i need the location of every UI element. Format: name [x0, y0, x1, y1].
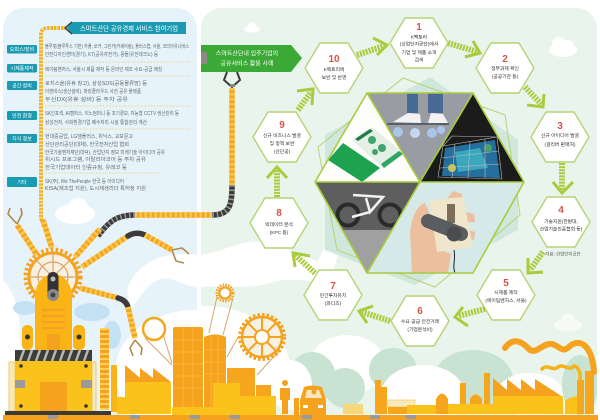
ground strip: [3, 411, 598, 420]
header: participating companies: [65, 22, 186, 34]
step 1 hexagon: [390, 18, 448, 68]
text: office: 안전디자인센터(경기), KT(공유자전거), 몽돌(유진테크노) 등: [45, 51, 158, 58]
arrow: 6 to 7: [359, 306, 390, 323]
smoke: small: [542, 366, 580, 380]
belts: [145, 297, 280, 375]
photo: green app: [315, 93, 420, 183]
text: information: 위시드 프로그램, 이탈리아코어 등 주차 공유: [45, 156, 146, 163]
ring: [143, 318, 165, 340]
text: space: 로지스올(유휴 창고), 삼성SDS(공동물류망) 등: [45, 80, 147, 87]
arrow: 1 to 2: [448, 41, 480, 57]
arrow: 10 to 1: [357, 38, 387, 55]
step 3 hexagon: 신규 아이디어 발굴: [541, 132, 580, 139]
arrow: 8 to 9: [267, 167, 287, 197]
arrow: 3 to 4: [553, 163, 573, 193]
step 5 hexagon: [477, 270, 535, 320]
step 4 hexagon: [532, 197, 590, 247]
machine: side ladders: [9, 362, 96, 411]
step 10 hexagon: K팩토리에: [324, 66, 344, 73]
step 10 hexagon: [305, 43, 363, 93]
panel: left background: [3, 8, 197, 415]
label: information: [7, 134, 37, 143]
photo: hoverboard: [367, 93, 473, 183]
person: [280, 380, 290, 414]
step 2 hexagon: 2: [502, 54, 508, 65]
step 8 hexagon: (KPC 등): [270, 230, 289, 236]
panel: right background: [201, 8, 597, 415]
step 1 hexagon: 기업 및 제품 소개: [402, 49, 436, 56]
text: space: [45, 80, 147, 103]
text: safety: 삼성전자, 사회환경기업 폐수처리 시설 통합관리 계산: [45, 119, 147, 126]
step 4 hexagon: 4: [558, 205, 564, 216]
step 6 hexagon: (기업분석비): [407, 326, 433, 333]
chimneys left: [100, 328, 117, 412]
text: office: 블루핏(블루투스 기반) 카풀, 쏘카, 그린카(카셰어링), 플러스캡, 서울, 코리아유니버스: [45, 43, 189, 50]
label: prototype: [7, 64, 37, 72]
green banner: case heading: [201, 45, 302, 72]
cloud: lower right: [554, 313, 582, 331]
step 2 hexagon: (공공기관 등): [492, 73, 519, 80]
machine: base: [15, 361, 92, 412]
label: safety: 안전 환경: [12, 112, 32, 120]
text: information: [45, 133, 165, 171]
city skyline: [100, 285, 594, 415]
label: space: 공간 장비: [12, 82, 32, 90]
arm: up: [43, 220, 52, 248]
photo: hand holding device: [367, 182, 524, 273]
step 1 hexagon: K팩토리: [411, 34, 427, 40]
label: information: 지식 정보: [12, 136, 32, 142]
photo: white bicycle: [315, 182, 420, 273]
step 1 hexagon: 검색: [415, 56, 423, 64]
photo mosaic hexagon: [315, 93, 524, 273]
step 3 hexagon: (걸리버 판매처): [544, 141, 576, 148]
step 8 hexagon: [250, 198, 308, 248]
text: safety: SK인포섹, AI캠퍼스, 이노컴퍼니 등 조기경보, 지능형 CCTV 생산관리 등: [45, 110, 179, 117]
step 7 hexagon: (와디즈): [325, 300, 342, 307]
building: tall: [173, 327, 203, 409]
step 10 hexagon: 보완 및 반영: [322, 74, 346, 81]
text: office: [45, 43, 189, 58]
step 3 hexagon: [531, 112, 589, 162]
step 6 hexagon: 수요·공급 안전거래: [401, 318, 439, 325]
factory: [117, 365, 171, 414]
step 2 hexagon: 정부과제 확인: [491, 65, 519, 72]
step 8 hexagon: 8: [276, 208, 282, 219]
text: space: 이앤비스(생산설비), 파킹클라우드 사전 공유 플랫폼: [45, 88, 141, 95]
text: others: [45, 178, 146, 192]
arm: upper right: [75, 229, 100, 257]
arrow: 7 to 8: [293, 253, 315, 273]
building: third: [227, 368, 271, 410]
text: prototype: 에이팀벤처스, 서울시 제품 제작 등 온라인 제조 수요-공급 매칭: [45, 66, 162, 73]
step 7 hexagon: 7: [330, 281, 336, 292]
step 7 hexagon: 민간투자유치: [320, 292, 346, 299]
text: information: 한국기업데이터 인증규정, 유레코 등: [45, 164, 127, 171]
label: office: 오피스/장비: [10, 46, 34, 53]
label: others: [7, 177, 37, 187]
building: second: [204, 334, 226, 407]
machine: tower: [35, 272, 72, 350]
green banner: case heading: 스마트산단내 입주기업의: [216, 50, 278, 58]
step 9 hexagon: 신규 비즈니스 발굴: [263, 132, 302, 139]
label: safety: [7, 111, 37, 120]
text: safety: [45, 110, 179, 126]
step 4 hexagon: 기술지원(한밭대,: [544, 218, 578, 225]
step 6 hexagon: 6: [417, 306, 423, 317]
text: others: KISA(제조업 지원), 도시재생리더 특허청 지원: [45, 185, 146, 192]
text: others: SK(주), We ThePeople 한국 등 아이디어: [45, 178, 124, 185]
label: prototype: 시제품제작: [10, 65, 34, 72]
photo: 3D wire model: [420, 93, 524, 183]
header: participating companies: 스마트산단 공유경제 서비스 참여기업: [80, 23, 178, 32]
text: space: 두산DX(유휴 설비) 등 주차 공유: [45, 96, 128, 103]
step 9 hexagon: (산단공): [274, 148, 291, 155]
step 7 hexagon: [304, 270, 362, 320]
step 9 hexagon: 및 정책 보완: [270, 140, 295, 147]
cloud: top left of green panel: [244, 22, 260, 32]
step 5 hexagon: (에이팀벤처스, 서울): [485, 297, 527, 304]
arrow: 2 to 3: [525, 87, 544, 107]
robot arms: [8, 208, 189, 356]
machine: side pods: [22, 325, 85, 350]
robot machine body: [9, 272, 96, 412]
small gear: [217, 285, 233, 301]
company list: [7, 43, 190, 192]
thin rotated hexagon and pale shape behind mosaic: [318, 77, 520, 287]
arm: right with elbow and claw: [82, 233, 189, 267]
label: office: [7, 45, 37, 54]
smoke: large: [505, 341, 594, 372]
low yellow buildings: [172, 383, 276, 415]
right factories: [343, 371, 594, 414]
arm: upper left with claw: [8, 208, 37, 255]
text: information: 현대중공업, LG엠플러스, 위닉스, 교보문고: [45, 133, 133, 140]
machine: hazard stripe band: [15, 350, 92, 361]
gear: main machine gear: [26, 250, 80, 304]
arrow: 9 to 10: [297, 89, 313, 110]
yellow track line from header: [41, 28, 67, 248]
arrow: 4 to 5: [528, 252, 543, 273]
cloud: top right: [549, 37, 577, 57]
step 9 hexagon: 9: [279, 120, 285, 131]
step 1 hexagon: 1: [416, 22, 422, 33]
source note: 자료: 산업단지공단: [545, 250, 581, 258]
step 1 hexagon: (산업단지공단)에서: [400, 40, 438, 48]
car: [294, 386, 326, 415]
step 2 hexagon: [476, 43, 534, 93]
step 5 hexagon: 시제품 제작: [494, 289, 518, 296]
step 4 hexagon: 산업기술진흥협회 등): [540, 226, 583, 232]
label: space: [7, 81, 37, 90]
arm: lower right with elbow and claw: [80, 288, 142, 356]
step 6 hexagon: [391, 296, 449, 346]
big gear: [240, 315, 284, 359]
label: others: 기타: [17, 179, 27, 186]
mosaic outlines: [315, 93, 524, 273]
text: information: 산단관리공단(대체), 한국전자산업 협회: [45, 141, 129, 148]
arrow: 5 to 6: [455, 307, 485, 326]
step 5 hexagon: 5: [503, 278, 509, 289]
green banner: case heading: 공유서비스 활용 사례: [220, 60, 274, 68]
step 3 hexagon: 3: [557, 121, 563, 132]
long robot arm to banner: [98, 72, 240, 236]
step 9 hexagon: [253, 112, 311, 162]
step 10 hexagon: 10: [328, 54, 340, 65]
step 8 hexagon: 빅데이터 분석: [265, 221, 293, 228]
text: information: 한국기술벤처재단(대덕), 산업단지 정보 미래기술 아이디어 공유: [45, 149, 165, 156]
